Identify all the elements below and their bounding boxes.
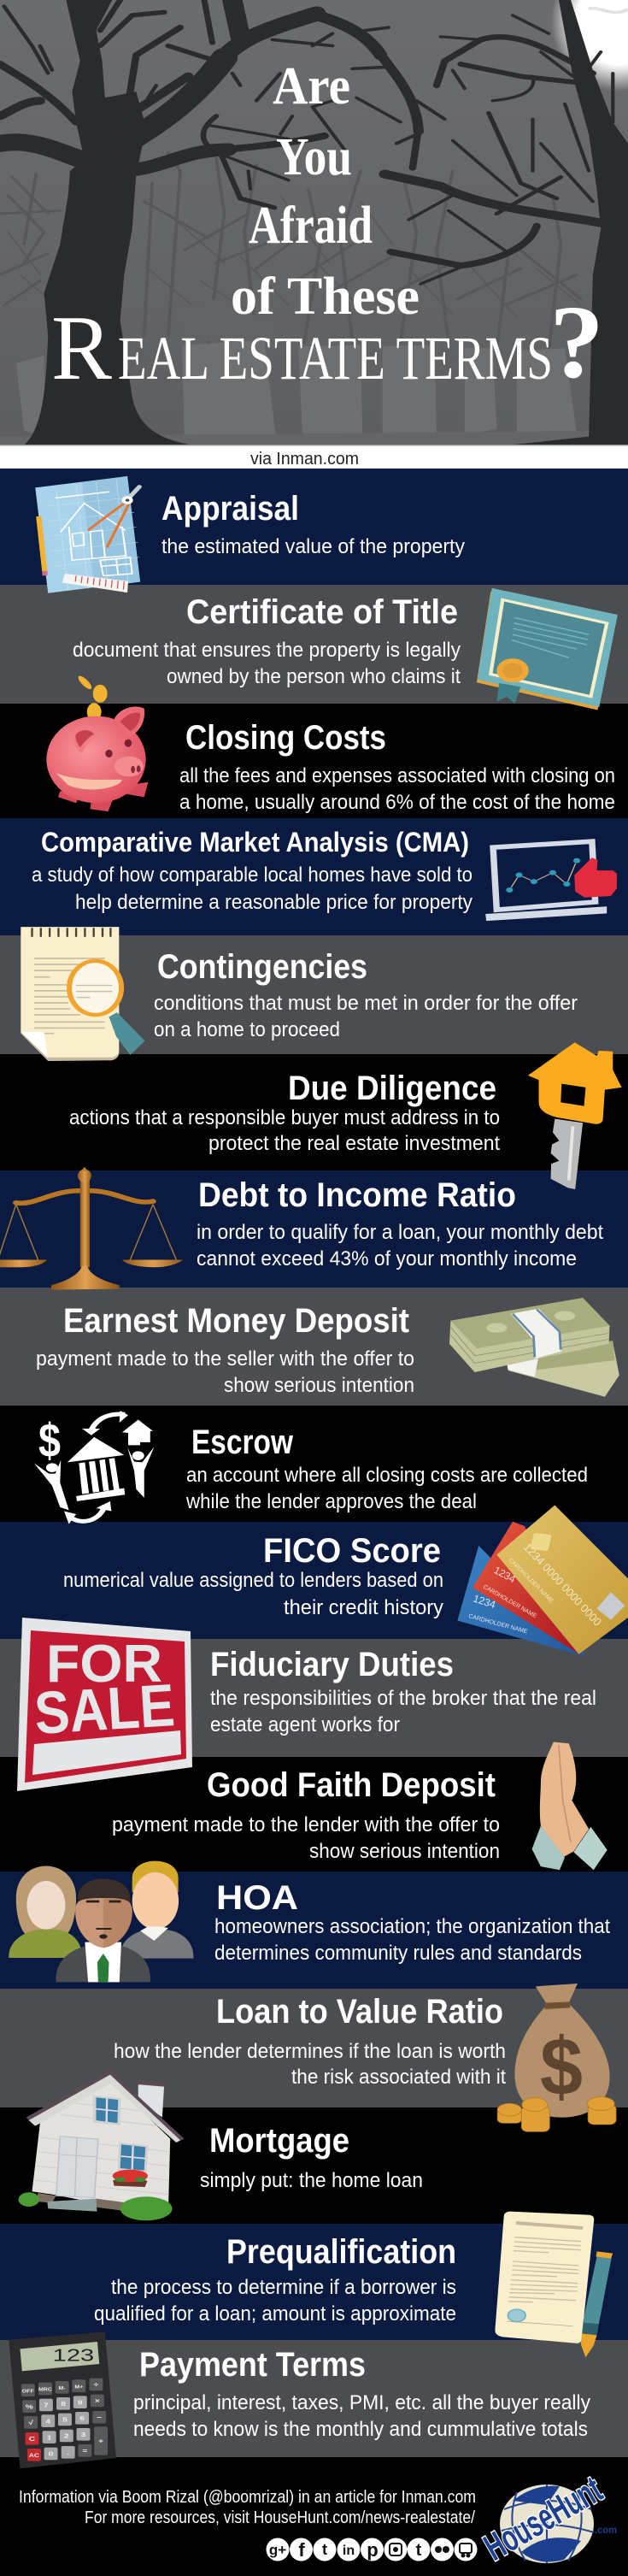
heading: Closing Costs <box>185 719 386 757</box>
panel: Debt to Income Ratio <box>0 1167 603 1290</box>
icon: calculator: 9 <box>78 2399 83 2406</box>
icon: praying hands <box>532 1742 607 1870</box>
icon: calculator: 123 <box>53 2346 94 2366</box>
description: document that ensures the property is legally <box>73 639 461 662</box>
description <box>210 1687 596 1736</box>
icon: calculator: M- <box>59 2386 66 2391</box>
icon: escrow bank and exchange: $ <box>38 1413 61 1467</box>
description: on a home to proceed <box>154 1018 340 1041</box>
panel: Mortgage <box>19 2071 423 2220</box>
heading: Good Faith Deposit <box>207 1766 496 1804</box>
icon: credit cards: 1234 0000 0000 0000 <box>521 1541 604 1629</box>
description: estate agent works for <box>210 1713 400 1736</box>
panel: Comparative Market Analysis <box>32 827 617 921</box>
heading: Prequalification <box>226 2233 456 2271</box>
description <box>133 2391 590 2441</box>
icon: three people <box>9 1861 193 1982</box>
description: a study of how comparable local homes have sold to <box>32 864 472 887</box>
description <box>32 864 472 914</box>
icon: credit cards <box>457 1505 628 1657</box>
icon: money bag and coins: $ <box>540 2021 583 2113</box>
social media icons <box>267 2538 477 2561</box>
icon: calculator: 6 <box>79 2414 85 2422</box>
description: while the lender approves the deal <box>185 1490 477 1513</box>
description: the process to determine if a borrower is <box>111 2276 456 2299</box>
description <box>197 1221 603 1270</box>
heading: Earnest Money Deposit <box>63 1302 409 1340</box>
description <box>112 1813 500 1863</box>
footer credits: Information via Boom Rizal (@boomrizal) in an article for Inman.com <box>19 2488 476 2507</box>
icon: money bag and coins <box>497 1984 616 2131</box>
panel: Earnest Money Deposit <box>36 1298 619 1397</box>
description: help determine a reasonable price for property <box>75 891 472 914</box>
panel: Certificate of Title <box>73 588 618 710</box>
description <box>114 2040 506 2089</box>
icon: balance scales <box>0 1167 184 1290</box>
question mark: ? <box>549 285 604 400</box>
social media icons: p <box>367 2539 379 2561</box>
panel: Payment Terms <box>9 2331 590 2468</box>
description: actions that a responsible buyer must address in to <box>69 1106 500 1129</box>
title line: of These: of These <box>231 268 420 326</box>
description: an account where all closing costs are collected <box>186 1464 588 1487</box>
social media icons: f <box>298 2539 305 2561</box>
panel: Good Faith Deposit <box>112 1742 607 1870</box>
description: conditions that must be met in order for the offer <box>154 992 578 1015</box>
social media icons: g+ <box>269 2542 286 2558</box>
panel: Due Diligence <box>69 1042 622 1189</box>
icon: blueprint <box>35 476 140 593</box>
heading: HOA <box>216 1879 298 1917</box>
heading: Escrow <box>191 1424 294 1461</box>
social media icons: t <box>416 2541 422 2560</box>
icon: calculator: OFF <box>22 2389 34 2394</box>
heading: Mortgage <box>209 2122 349 2160</box>
panel: footer <box>19 2468 617 2569</box>
icon: contract and fountain pen <box>495 2212 613 2357</box>
footer credits: For more resources, visit HouseHunt.com/news-realestate/ <box>85 2508 475 2527</box>
description: how the lender determines if the loan is worth <box>114 2040 506 2063</box>
description <box>154 992 578 1041</box>
title <box>51 57 604 400</box>
social media icons: in <box>343 2544 355 2558</box>
description: payment made to the lender with the offer to <box>112 1813 500 1836</box>
description <box>214 1915 610 1965</box>
panel: Escrow <box>34 1411 588 1524</box>
heading: Certificate of Title <box>186 593 458 631</box>
heading: Payment Terms <box>139 2346 366 2384</box>
icon: calculator: 7 <box>44 2402 49 2408</box>
description: cannot exceed 43% of your monthly income <box>197 1247 577 1270</box>
icon: house key <box>528 1042 622 1189</box>
description: determines community rules and standards <box>214 1942 582 1965</box>
HouseHunt logo: .com <box>595 2524 617 2536</box>
icon: calculator: C <box>29 2435 36 2443</box>
heading: Loan to Value Ratio <box>216 1993 503 2031</box>
icon: calculator: MRC <box>38 2388 53 2392</box>
icon: calculator: 2 <box>64 2432 69 2439</box>
icon: calculator: 3 <box>81 2431 85 2438</box>
description: numerical value assigned to lenders based on <box>63 1569 443 1592</box>
icon: certificate <box>477 588 618 710</box>
description <box>179 764 615 814</box>
description <box>73 639 461 688</box>
icon: cash stacks <box>449 1298 619 1397</box>
icon: credit cards: 1234 <box>472 1593 497 1611</box>
icon: escrow bank and exchange <box>34 1411 154 1524</box>
description: owned by the person who claims it <box>167 665 461 688</box>
description: show serious intention <box>224 1374 414 1397</box>
heading: Comparative Market Analysis (CMA) <box>41 827 469 858</box>
description <box>63 1569 443 1619</box>
description: the responsibilities of the broker that the real <box>210 1687 596 1710</box>
footer credits <box>19 2488 476 2527</box>
icon: calculator: √ <box>28 2419 33 2426</box>
description: the risk associated with it <box>291 2066 506 2089</box>
icon: for sale sign <box>17 1618 192 1791</box>
icon: calculator: 5 <box>62 2416 67 2423</box>
icon: calculator: + <box>98 2437 103 2444</box>
description: needs to know is the monthly and cummulative totals <box>133 2418 588 2441</box>
HouseHunt logo <box>477 2468 617 2569</box>
heading: Debt to Income Ratio <box>198 1176 516 1214</box>
panel: FICO Score <box>63 1505 628 1657</box>
description <box>185 1464 588 1513</box>
social media icons: t <box>322 2541 327 2558</box>
title line: Afraid: Afraid <box>249 197 373 255</box>
description: qualified for a loan; amount is approximate <box>94 2302 456 2325</box>
description <box>69 1106 500 1155</box>
icon: house <box>19 2071 185 2220</box>
header: spooky forest illustration <box>0 0 628 445</box>
heading: Fiduciary Duties <box>210 1646 454 1683</box>
description: show serious intention <box>309 1840 500 1863</box>
heading: Appraisal <box>161 490 299 528</box>
icon: for sale sign: FOR <box>46 1635 162 1694</box>
description: their credit history <box>284 1596 443 1619</box>
description <box>94 2276 456 2325</box>
icon: calculator: × <box>95 2397 100 2404</box>
icon: calculator: 4 <box>45 2418 50 2425</box>
description: principal, interest, taxes, PMI, etc. all the buyer really <box>133 2391 590 2414</box>
title line: Real estate terms: R <box>51 298 112 399</box>
icon: calculator: − <box>97 2414 102 2421</box>
icon: for sale sign: SALE <box>32 1671 177 1747</box>
icon: calculator: ÷ <box>94 2381 98 2388</box>
icon: credit cards: CARDHOLDER NAME <box>482 1584 537 1619</box>
icon: credit cards: CARDHOLDER NAME <box>467 1613 528 1635</box>
icon: document and magnifier <box>21 927 145 1061</box>
panel: Prequalification <box>94 2212 613 2357</box>
description: protect the real estate investment <box>208 1132 500 1155</box>
icon: piggy bank <box>46 675 148 811</box>
icon: laptop chart with thumb up <box>485 841 617 921</box>
panel: Fiduciary Duties <box>17 1618 596 1791</box>
description <box>36 1347 414 1397</box>
icon: calculator: 1 <box>47 2434 52 2441</box>
icon: calculator: 8 <box>61 2400 66 2408</box>
icon: credit cards: 1234 <box>492 1564 518 1585</box>
icon: calculator: . <box>67 2449 69 2456</box>
panel: Closing Costs <box>46 675 615 814</box>
source line: via Inman.com <box>250 450 359 469</box>
description: the estimated value of the property <box>161 535 465 558</box>
panel: Loan to Value Ratio <box>114 1984 616 2131</box>
panel: Appraisal <box>35 476 465 593</box>
icon: calculator: = <box>82 2447 87 2455</box>
description: in order to qualify for a loan, your monthly debt <box>197 1221 603 1244</box>
title line: You: You <box>276 128 352 186</box>
description: homeowners association; the organization that <box>214 1915 610 1938</box>
icon: calculator: M+ <box>74 2384 84 2390</box>
heading: Contingencies <box>157 948 367 986</box>
panel: HOA <box>9 1861 610 1982</box>
icon: calculator <box>9 2331 116 2468</box>
icon: credit cards: CARDHOLDER NAME <box>508 1557 555 1605</box>
icon: calculator: 0 <box>49 2450 53 2457</box>
title line: Are: Are <box>273 57 350 115</box>
icon: calculator: AC <box>29 2452 40 2459</box>
panel: Contingencies <box>21 927 578 1061</box>
description: payment made to the seller with the offer to <box>36 1347 414 1371</box>
heading: Due Diligence <box>288 1070 496 1107</box>
icon: calculator: % <box>26 2403 33 2410</box>
heading: FICO Score <box>263 1532 441 1570</box>
description: simply put: the home loan <box>200 2169 423 2192</box>
